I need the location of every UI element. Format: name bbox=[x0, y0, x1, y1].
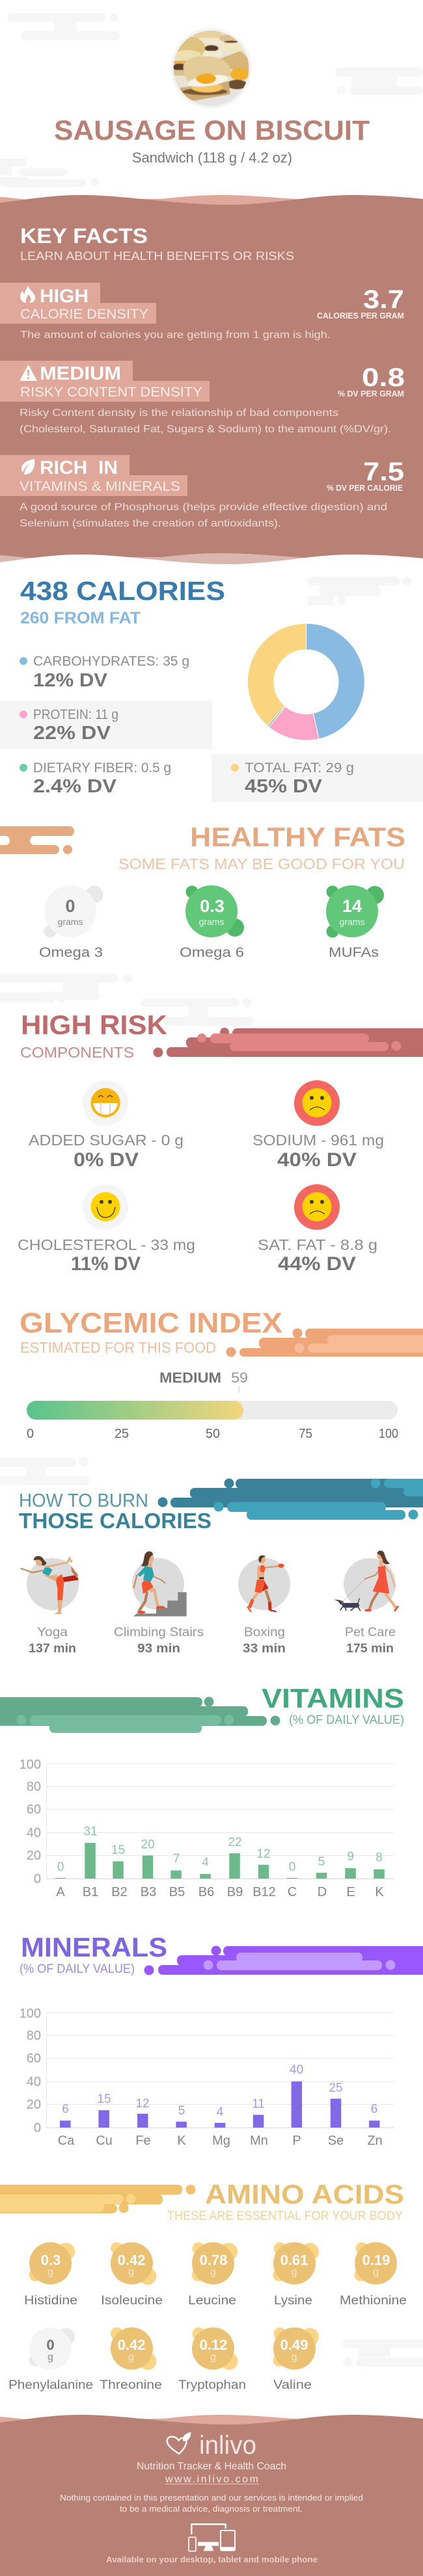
heading: glycemic index: GLYCEMIC INDEX bbox=[20, 1307, 282, 1339]
bar chart: minerals: 11 bbox=[252, 2098, 265, 2111]
panel: minerals bbox=[20, 1932, 423, 2148]
bar chart: minerals: Zn bbox=[367, 2133, 383, 2148]
logo: inlivo: inlivo bbox=[199, 2431, 256, 2460]
bar chart: minerals: 60 bbox=[27, 2051, 41, 2066]
risk item: added sugar bbox=[29, 1080, 184, 1171]
bar chart: vitamins: 31 bbox=[83, 1825, 98, 1838]
stat: omega 3: Omega 3 bbox=[39, 945, 103, 960]
gauge scale: 50 bbox=[206, 1427, 220, 1441]
stat: omega 3: 0 bbox=[65, 896, 75, 916]
decorative header cloud bbox=[154, 1028, 423, 1057]
bar chart: minerals bbox=[20, 2007, 394, 2148]
panel: high risk components bbox=[18, 1009, 423, 1275]
background cloud: burn bbox=[0, 1457, 90, 1485]
legend: total fat bbox=[231, 761, 354, 797]
fact: medium risky content density: Risky Content density is the relationship of bad components bbox=[20, 408, 338, 419]
fact: rich in vitamins and minerals: % DV PER CALORIE bbox=[327, 484, 403, 493]
bar chart: vitamins: 9 bbox=[347, 1850, 354, 1864]
bar chart: minerals: 0 bbox=[34, 2121, 41, 2135]
bar chart: minerals: Mg bbox=[212, 2133, 230, 2148]
activity: climbing stairs bbox=[114, 1551, 204, 1656]
legend: carbohydrates: 12% DV bbox=[33, 670, 108, 691]
subheading: components: COMPONENTS bbox=[20, 1044, 134, 1061]
risk item: saturated fat: 44% DV bbox=[278, 1253, 356, 1275]
stat: isoleucine: Isoleucine bbox=[101, 2294, 163, 2308]
fact: high calorie density: 3.7 bbox=[363, 285, 404, 314]
bar chart: vitamins: 7 bbox=[173, 1853, 180, 1866]
decorative header cloud bbox=[226, 1329, 423, 1357]
bar chart: vitamins: 0 bbox=[34, 1872, 41, 1886]
bar chart: vitamins: 0 bbox=[57, 1860, 64, 1874]
stat: phenylalanine: Phenylalanine bbox=[8, 2378, 93, 2392]
risk item: added sugar: 0% DV bbox=[74, 1149, 139, 1171]
fact: high calorie density: HIGH bbox=[40, 286, 89, 307]
stat: lysine bbox=[273, 2243, 319, 2308]
fact: rich in vitamins and minerals: 7.5 bbox=[363, 458, 404, 486]
panel: key facts bbox=[0, 195, 423, 572]
bar chart: minerals: 20 bbox=[27, 2098, 41, 2112]
bar chart: vitamins: E bbox=[346, 1885, 355, 1899]
activity: climbing stairs: 93 min bbox=[137, 1642, 180, 1656]
risk item: saturated fat: SAT. FAT - 8.8 g bbox=[258, 1236, 377, 1253]
stat: leucine bbox=[188, 2243, 238, 2308]
bar chart: vitamins bbox=[20, 1758, 394, 1899]
bar chart: minerals: P bbox=[292, 2133, 301, 2148]
stat: phenylalanine: g bbox=[48, 2352, 53, 2363]
stat: methionine: g bbox=[373, 2267, 379, 2278]
disclaimer: Nothing contained in this presentation and our services is intended or implied bbox=[60, 2493, 363, 2503]
heading: high risk: HIGH RISK bbox=[21, 1009, 167, 1040]
risk item: cholesterol bbox=[18, 1184, 195, 1275]
risk item: cholesterol: CHOLESTEROL - 33 mg bbox=[18, 1236, 195, 1253]
risk item: sodium: 40% DV bbox=[277, 1149, 357, 1171]
bar chart: vitamins: 5 bbox=[318, 1855, 325, 1869]
figure: climbing stairs bbox=[133, 1551, 187, 1617]
risk item: cholesterol: 11% DV bbox=[71, 1253, 141, 1275]
heading: those calories: THOSE CALORIES bbox=[19, 1509, 212, 1533]
gauge label: MEDIUM bbox=[159, 1370, 221, 1386]
subheading: LEARN ABOUT HEALTH BENEFITS OR RISKS bbox=[20, 250, 294, 263]
bar chart: minerals: Fe bbox=[135, 2133, 151, 2148]
stat: valine: g bbox=[292, 2352, 297, 2363]
fact: medium risky content density: % DV PER GRAM bbox=[338, 389, 404, 398]
tagline: Nutrition Tracker & Health Coach bbox=[137, 2461, 286, 2472]
fact: medium risky content density bbox=[0, 361, 405, 435]
panel: vitamins bbox=[0, 1683, 404, 1899]
stat: leucine: 0.78 bbox=[200, 2252, 227, 2269]
stat: tryptophan: Tryptophan bbox=[178, 2378, 246, 2392]
decorative header cloud bbox=[157, 1478, 423, 1520]
stat: tryptophan: 0.12 bbox=[200, 2337, 227, 2353]
gauge scale bbox=[27, 1427, 398, 1441]
icon: smiling face bbox=[91, 1192, 120, 1221]
bar chart: minerals: Se bbox=[328, 2133, 344, 2148]
bar chart: vitamins: 100 bbox=[20, 1758, 41, 1772]
stat: threonine: 0.42 bbox=[118, 2337, 145, 2353]
subheading: (% OF DAILY VALUE) bbox=[20, 1962, 135, 1976]
title: SAUSAGE ON BISCUIT bbox=[54, 115, 370, 146]
fact: rich in vitamins and minerals bbox=[0, 455, 404, 529]
bar chart: vitamins: D bbox=[318, 1885, 327, 1899]
bar chart: minerals: 100 bbox=[20, 2007, 41, 2021]
bar chart: vitamins: 4 bbox=[202, 1856, 209, 1869]
activity: yoga: 137 min bbox=[29, 1642, 76, 1656]
bar chart: vitamins: 0 bbox=[289, 1860, 295, 1874]
stat: omega 3: grams bbox=[58, 917, 83, 927]
legend: protein bbox=[20, 707, 118, 744]
legend: protein: 22% DV bbox=[33, 723, 111, 744]
bar chart: vitamins: B3 bbox=[141, 1885, 156, 1899]
stat: methionine: Methionine bbox=[340, 2294, 407, 2308]
fact: rich in vitamins and minerals: A good source of Phosphorus (helps provide effective digestion) and bbox=[20, 502, 387, 513]
heading: healthy fats: HEALTHY FATS bbox=[190, 822, 405, 852]
stat: omega 6 bbox=[180, 885, 244, 960]
gauge label: 59 bbox=[231, 1370, 248, 1386]
figure: yoga pose bbox=[21, 1556, 79, 1614]
stat: threonine: g bbox=[128, 2352, 134, 2363]
bar chart: vitamins: 22 bbox=[228, 1836, 242, 1849]
stat: threonine bbox=[100, 2327, 162, 2392]
fact: high calorie density: The amount of calories you are getting from 1 gram is high. bbox=[20, 330, 331, 341]
logo: inlivo bbox=[167, 2431, 256, 2460]
icon: sad face bbox=[302, 1088, 332, 1117]
bar chart: vitamins: B1 bbox=[83, 1885, 98, 1899]
food photo bbox=[171, 28, 251, 109]
stat: isoleucine: 0.42 bbox=[118, 2252, 145, 2269]
figure: boxer bbox=[247, 1555, 284, 1612]
icon: sad face bbox=[302, 1192, 332, 1221]
bar chart: vitamins: 15 bbox=[111, 1843, 125, 1857]
bar chart: vitamins: B5 bbox=[169, 1885, 185, 1899]
bar chart: vitamins: 60 bbox=[27, 1802, 41, 1817]
heading: vitamins: VITAMINS bbox=[262, 1683, 404, 1713]
legend: dietary fiber: DIETARY FIBER: 0.5 g bbox=[33, 761, 171, 775]
bar chart: vitamins: 20 bbox=[141, 1838, 155, 1852]
bar chart: vitamins: 40 bbox=[27, 1826, 41, 1840]
stat: mufas bbox=[326, 885, 384, 960]
gauge scale: 100 bbox=[379, 1427, 398, 1441]
bar chart: minerals: 40 bbox=[27, 2075, 41, 2089]
fact: medium risky content density: RISKY CONTENT DENSITY bbox=[20, 385, 202, 400]
stat: methionine: 0.19 bbox=[362, 2252, 390, 2269]
bar chart: vitamins: K bbox=[375, 1885, 384, 1899]
decorative header cloud bbox=[0, 826, 82, 854]
heading: calories: 438 CALORIES bbox=[20, 576, 225, 606]
stat: isoleucine bbox=[101, 2243, 163, 2308]
bar chart: minerals: K bbox=[177, 2133, 186, 2148]
panel: amino acids bbox=[0, 2179, 407, 2392]
stat: mufas: 14 bbox=[342, 896, 362, 916]
stat: threonine: Threonine bbox=[100, 2378, 162, 2392]
stat: leucine: g bbox=[210, 2267, 216, 2278]
legend: dietary fiber bbox=[20, 761, 171, 797]
bar chart: minerals: 6 bbox=[62, 2103, 69, 2116]
stat: mufas: grams bbox=[340, 917, 364, 927]
bar chart: vitamins: A bbox=[56, 1885, 65, 1899]
bar chart: vitamins: C bbox=[288, 1885, 297, 1899]
stat: isoleucine: g bbox=[128, 2267, 134, 2278]
fact: medium risky content density: 0.8 bbox=[362, 363, 405, 392]
fact: high calorie density: CALORIE DENSITY bbox=[20, 307, 148, 322]
fact: high calorie density bbox=[0, 283, 404, 341]
disclaimer bbox=[60, 2493, 363, 2514]
stat: histidine: Histidine bbox=[24, 2294, 77, 2308]
bar chart: minerals: 6 bbox=[371, 2103, 377, 2116]
stat: tryptophan: g bbox=[210, 2352, 216, 2363]
background clouds: risk bbox=[0, 974, 254, 1026]
stat: histidine bbox=[24, 2243, 77, 2308]
gauge scale: 25 bbox=[115, 1427, 129, 1441]
legend: carbohydrates bbox=[20, 654, 189, 691]
stat: omega 6: Omega 6 bbox=[180, 945, 244, 960]
stat: lysine: Lysine bbox=[274, 2294, 312, 2308]
bar chart: minerals: Ca bbox=[58, 2133, 75, 2148]
icon: devices bbox=[189, 2524, 235, 2551]
activity: pet care: Pet Care bbox=[345, 1626, 396, 1639]
stat: omega 6: 0.3 bbox=[200, 896, 225, 916]
gauge bar bbox=[27, 1401, 398, 1420]
activity: climbing stairs: Climbing Stairs bbox=[114, 1626, 204, 1639]
legend: carbohydrates: CARBOHYDRATES: 35 g bbox=[33, 654, 189, 669]
risk item: added sugar: ADDED SUGAR - 0 g bbox=[29, 1132, 184, 1149]
activity: boxing: 33 min bbox=[243, 1642, 286, 1656]
stat: methionine bbox=[340, 2243, 407, 2308]
panel: healthy fats bbox=[0, 822, 405, 960]
stat: histidine: g bbox=[48, 2267, 53, 2278]
bar chart: minerals: 12 bbox=[135, 2097, 150, 2111]
background cloud: calories bbox=[308, 577, 412, 605]
bar chart: minerals: 40 bbox=[290, 2063, 303, 2077]
icon: flame bbox=[20, 286, 35, 303]
stat: phenylalanine: 0 bbox=[46, 2337, 55, 2353]
decorative header cloud bbox=[0, 2185, 195, 2213]
bar chart: vitamins: 20 bbox=[27, 1849, 41, 1863]
bar chart: vitamins: 12 bbox=[256, 1847, 271, 1861]
bar chart: minerals: Mn bbox=[250, 2133, 268, 2148]
bar chart: minerals: 80 bbox=[27, 2029, 41, 2043]
icon: grinning face bbox=[91, 1088, 120, 1117]
bar chart: vitamins: 8 bbox=[375, 1851, 383, 1865]
stat: phenylalanine bbox=[8, 2327, 93, 2392]
availability note: Available on your desktop, tablet and mobile phone bbox=[106, 2555, 318, 2564]
bar chart: minerals: 4 bbox=[217, 2105, 224, 2119]
heading: amino acids: AMINO ACIDS bbox=[205, 2179, 404, 2209]
stat: omega 3 bbox=[39, 885, 103, 960]
stat: mufas: MUFAs bbox=[329, 945, 379, 960]
fact: medium risky content density: MEDIUM bbox=[40, 363, 121, 384]
stat: leucine: Leucine bbox=[188, 2294, 236, 2308]
disclaimer: to be a medical advice, diagnosis or treatment. bbox=[120, 2504, 303, 2514]
legend: total fat: TOTAL FAT: 29 g bbox=[245, 761, 354, 775]
bar chart: minerals: 5 bbox=[178, 2104, 185, 2118]
stat: valine bbox=[273, 2327, 319, 2392]
bar chart: minerals: 15 bbox=[97, 2092, 111, 2106]
icon: leaf bbox=[21, 459, 34, 475]
activity: boxing bbox=[238, 1555, 290, 1656]
subheading: THESE ARE ESSENTIAL FOR YOUR BODY bbox=[167, 2209, 403, 2223]
fact: high calorie density: CALORIES PER GRAM bbox=[317, 311, 404, 320]
stat: lysine: g bbox=[292, 2267, 297, 2278]
bar chart: vitamins: B12 bbox=[252, 1885, 276, 1899]
legend: dietary fiber: 2.4% DV bbox=[33, 776, 117, 797]
heading: minerals: MINERALS bbox=[21, 1932, 167, 1962]
risk item: sodium: SODIUM - 961 mg bbox=[252, 1132, 384, 1149]
subheading: (% OF DAILY VALUE) bbox=[289, 1713, 404, 1727]
risk item: saturated fat bbox=[258, 1184, 377, 1275]
heading: how to burn: HOW TO BURN bbox=[19, 1490, 148, 1511]
stat: histidine: 0.3 bbox=[41, 2252, 61, 2269]
background clouds: header bbox=[0, 13, 423, 187]
heading: key facts: KEY FACTS bbox=[20, 224, 148, 248]
stat: lysine: 0.61 bbox=[280, 2252, 308, 2269]
fact: rich in vitamins and minerals: VITAMINS & MINERALS bbox=[20, 479, 180, 494]
stat: omega 6: grams bbox=[199, 917, 224, 927]
bar chart: vitamins: B6 bbox=[198, 1885, 214, 1899]
footer bbox=[0, 2415, 423, 2576]
stat: valine: 0.49 bbox=[280, 2337, 308, 2353]
legend: protein: PROTEIN: 11 g bbox=[33, 707, 118, 722]
icon: warning triangle bbox=[20, 365, 37, 381]
activity: yoga: Yoga bbox=[37, 1626, 68, 1639]
bar chart: vitamins: B2 bbox=[111, 1885, 128, 1899]
subheading: ESTIMATED FOR THIS FOOD bbox=[20, 1339, 216, 1356]
activity: boxing: Boxing bbox=[244, 1626, 285, 1639]
panel: glycemic index bbox=[20, 1307, 423, 1441]
bar chart: vitamins: B9 bbox=[227, 1885, 243, 1899]
activity: yoga bbox=[21, 1556, 79, 1656]
background cloud: amino acids bbox=[341, 2339, 423, 2367]
risk item: sodium bbox=[252, 1080, 384, 1171]
donut chart bbox=[247, 623, 364, 740]
decorative header cloud bbox=[144, 1946, 423, 1975]
stat: valine: Valine bbox=[273, 2378, 312, 2392]
subtitle: Sandwich (118 g / 4.2 oz) bbox=[132, 150, 292, 166]
decorative header cloud bbox=[0, 1697, 280, 1733]
gauge scale: 75 bbox=[299, 1427, 312, 1441]
fact: rich in vitamins and minerals: RICH IN bbox=[40, 458, 118, 478]
fact: rich in vitamins and minerals: Selenium (stimulates the creation of antioxidants). bbox=[20, 518, 281, 529]
subheading: SOME FATS MAY BE GOOD FOR YOU bbox=[118, 855, 405, 872]
panel: how to burn bbox=[19, 1478, 423, 1656]
subheading: from fat: 260 FROM FAT bbox=[20, 609, 141, 627]
gauge scale: 0 bbox=[27, 1427, 34, 1441]
bar chart: vitamins: 80 bbox=[27, 1780, 41, 1794]
legend: total fat: 45% DV bbox=[245, 776, 323, 797]
website link: www.inlivo.com bbox=[165, 2474, 258, 2485]
stat: tryptophan bbox=[178, 2327, 246, 2392]
activity: pet care: 175 min bbox=[346, 1642, 394, 1656]
gauge label bbox=[159, 1370, 248, 1393]
panel: calories bbox=[0, 576, 423, 802]
activity: pet care bbox=[334, 1550, 398, 1656]
bar chart: minerals: 25 bbox=[329, 2081, 343, 2095]
fact: medium risky content density: (Cholesterol, Saturated Fat, Sugars & Sodium) to the amount (%DV/gr). bbox=[20, 424, 391, 435]
bar chart: minerals: Cu bbox=[96, 2133, 113, 2148]
figure: woman walking dog bbox=[334, 1550, 398, 1611]
